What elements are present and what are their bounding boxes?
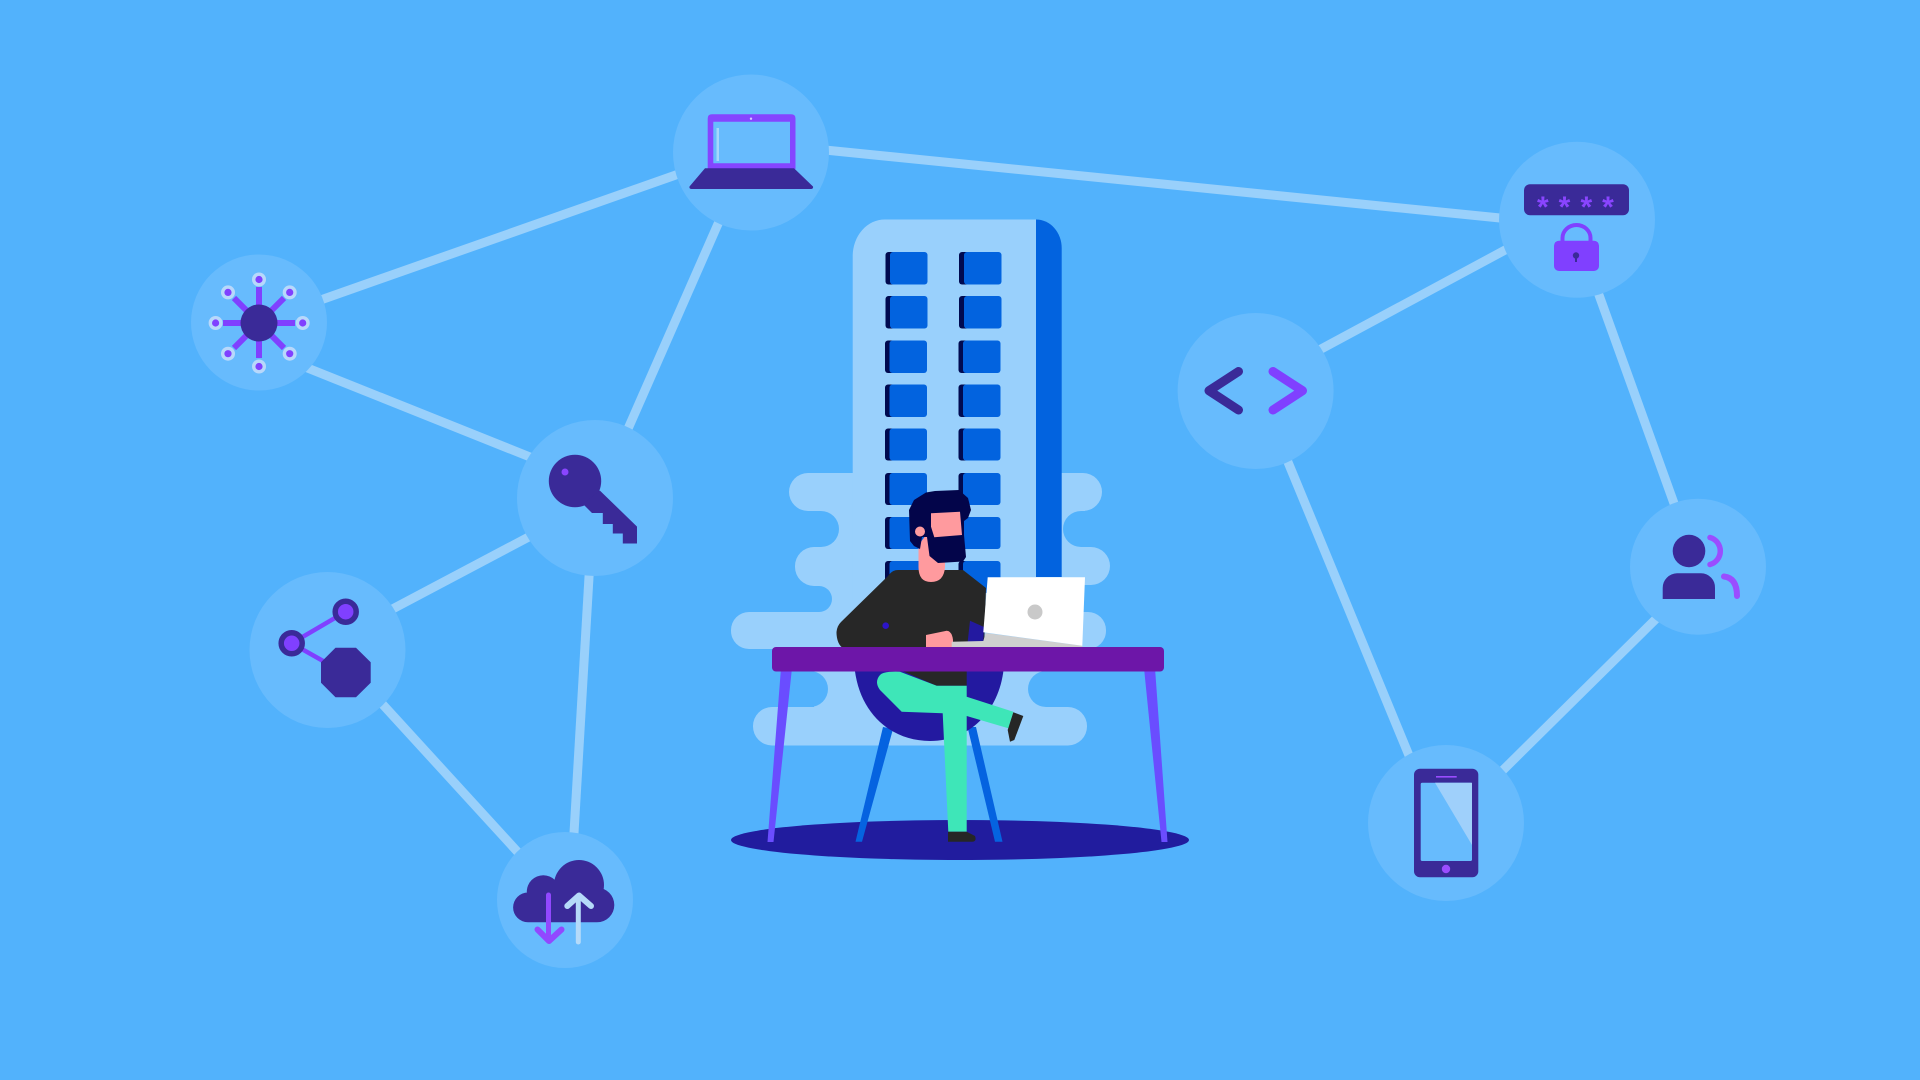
node: smartphone (1368, 745, 1524, 901)
floor shadow (731, 820, 1189, 860)
building (853, 219, 1062, 600)
standing shoe (948, 832, 976, 842)
shirt below table (900, 670, 967, 686)
laptop on desk (952, 577, 1085, 650)
node: laptop (673, 74, 829, 230)
background cloud shapes (700, 473, 1178, 746)
node: password lock (1499, 142, 1655, 298)
node: password lock: * (1602, 191, 1614, 224)
trousers (877, 672, 1013, 832)
shirt (836, 570, 986, 650)
node: code brackets (1178, 313, 1334, 469)
node: users (1630, 499, 1766, 635)
node: network hub (191, 254, 327, 390)
chair back sliver (967, 621, 984, 648)
ear (915, 526, 925, 536)
neck (918, 535, 945, 582)
node: share (250, 572, 406, 728)
building windows (885, 252, 1002, 593)
node: password lock: * (1537, 191, 1549, 224)
node: cloud transfer (497, 832, 633, 968)
face (931, 512, 962, 537)
node: password lock: * (1580, 191, 1592, 224)
raised shoe (1008, 712, 1023, 742)
table top (772, 647, 1164, 672)
hair and beard (909, 490, 971, 563)
hand (926, 631, 953, 650)
table legs (768, 668, 1168, 842)
person (836, 490, 1023, 842)
node: password lock: * (1559, 191, 1571, 224)
node: key (517, 420, 673, 576)
chair (854, 665, 1004, 842)
